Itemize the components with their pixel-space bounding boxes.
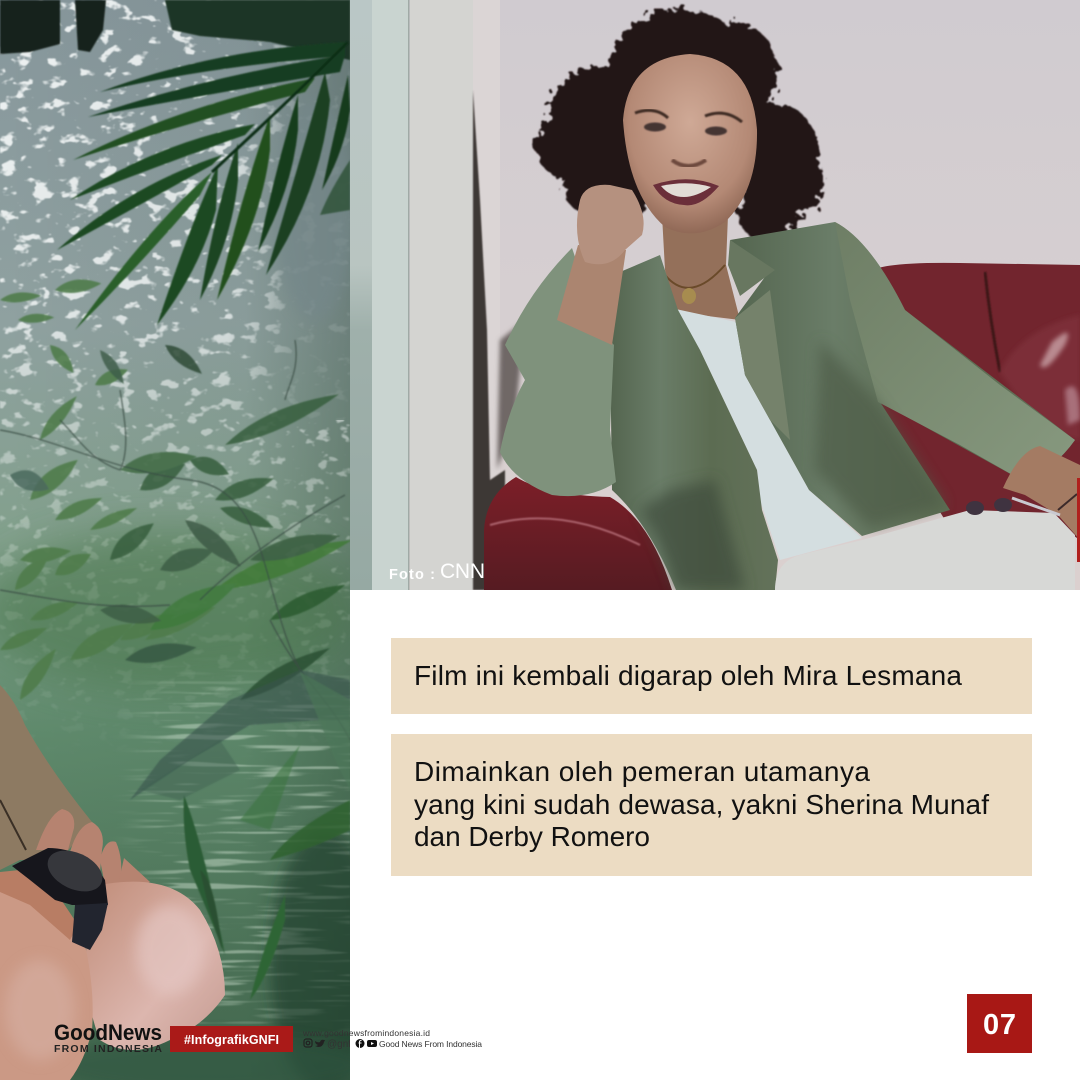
icon: facebook bbox=[356, 1039, 364, 1048]
photo credit: Foto : bbox=[389, 567, 435, 583]
logo: GoodNews from Indonesia: GoodNews bbox=[54, 1020, 162, 1045]
callout: cast: dan Derby Romero bbox=[414, 821, 650, 852]
palm frond bbox=[57, 42, 350, 330]
man with crossed arms and watch bbox=[0, 685, 225, 1080]
callout: director bbox=[391, 638, 1032, 714]
panel: portrait photo of Mira Lesmana bbox=[350, 0, 1080, 590]
shirt bbox=[0, 685, 92, 870]
website and social handles: www.goodnewsfromindonesia.id bbox=[302, 1028, 430, 1038]
necklace bbox=[665, 265, 725, 288]
logo: GoodNews from Indonesia: FROM INDONESIA bbox=[54, 1043, 162, 1055]
jacket body bbox=[610, 222, 1075, 590]
neck bbox=[662, 215, 740, 320]
hashtag tag bbox=[170, 1026, 293, 1052]
callout: cast bbox=[391, 734, 1032, 876]
sofa back bbox=[870, 263, 1080, 540]
logo: GoodNews from Indonesia bbox=[54, 1020, 162, 1055]
website and social handles bbox=[302, 1028, 482, 1049]
eyes and brows bbox=[635, 110, 742, 122]
panel: jungle photo background bbox=[0, 0, 380, 1080]
callout: director: Film ini kembali digarap oleh Mira Lesmana bbox=[414, 660, 962, 691]
icon: twitter bbox=[315, 1040, 325, 1047]
pants bbox=[775, 510, 1075, 590]
nose bbox=[672, 160, 706, 166]
photo credit bbox=[389, 560, 485, 583]
right forearm bbox=[1003, 446, 1080, 540]
page number badge bbox=[967, 994, 1032, 1053]
smile bbox=[653, 179, 719, 205]
page number badge: 07 bbox=[983, 1009, 1016, 1041]
website and social handles: Good News From Indonesia bbox=[379, 1039, 482, 1049]
face bbox=[623, 54, 757, 233]
bracelet bbox=[966, 494, 1077, 515]
hair bbox=[536, 8, 824, 242]
handle under the white panel: @gnfi bbox=[327, 1039, 353, 1050]
forearm and hand bbox=[557, 185, 644, 345]
watch bbox=[12, 842, 109, 950]
icon: instagram bbox=[304, 1039, 312, 1047]
left sleeve bbox=[500, 248, 616, 496]
forearm right bbox=[86, 882, 225, 1050]
forearm left bbox=[0, 872, 93, 1080]
left armrest bbox=[484, 477, 672, 590]
icon: youtube bbox=[367, 1040, 377, 1047]
door shadow bbox=[473, 90, 505, 590]
mid foliage leaves bbox=[0, 276, 355, 740]
callout: cast: yang kini sudah dewasa, yakni Sherina Munaf bbox=[414, 789, 989, 820]
shirt white bbox=[671, 308, 862, 560]
callout: cast: Dimainkan oleh pemeran utamanya bbox=[414, 756, 870, 787]
hashtag tag: #InfografikGNFI bbox=[184, 1033, 279, 1047]
panel: white content area bbox=[350, 590, 1080, 1080]
lower palm and dark blades bbox=[130, 670, 350, 1000]
photo credit: CNN bbox=[440, 560, 485, 583]
fingers bbox=[36, 809, 150, 890]
dark canopy top bbox=[0, 0, 350, 60]
